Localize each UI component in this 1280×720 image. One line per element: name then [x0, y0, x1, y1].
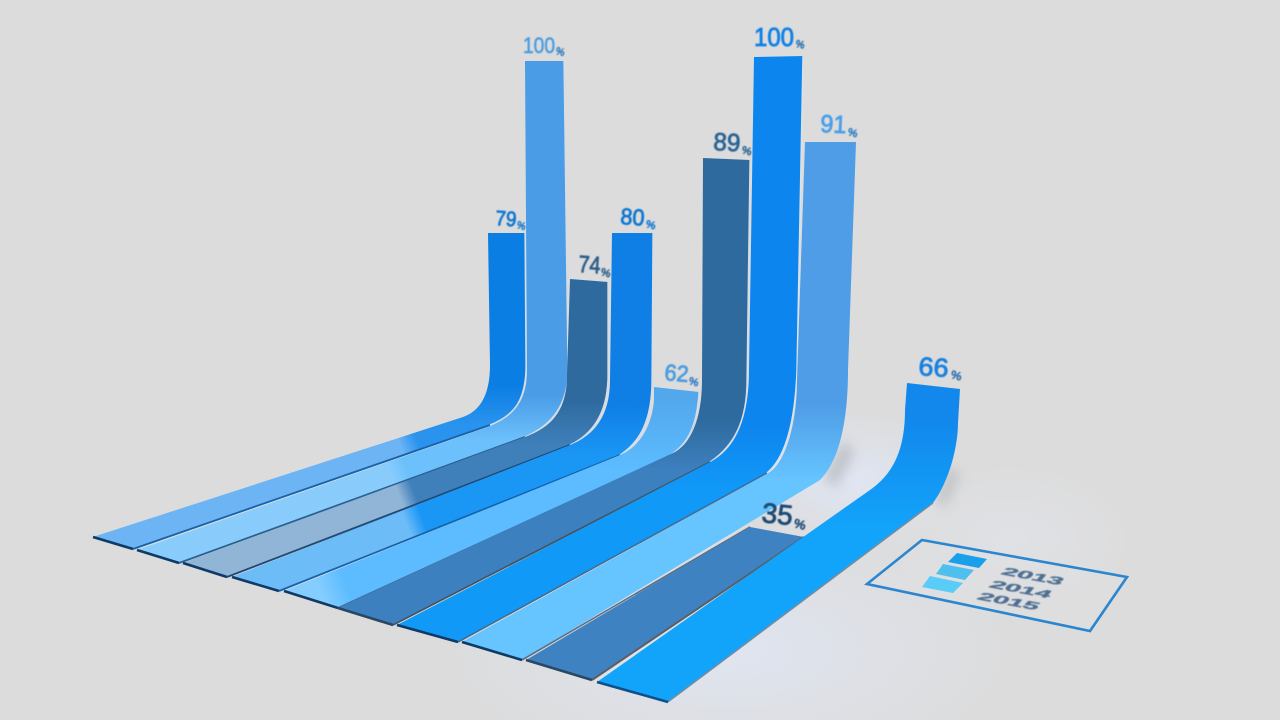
legend swatch: 2014	[936, 564, 974, 580]
label: 80%: 80	[620, 203, 645, 231]
legend frame	[867, 540, 1127, 631]
ribbon: 80%	[232, 233, 653, 591]
label: 62%: %	[687, 375, 700, 390]
legend labels	[974, 565, 1068, 613]
label: 62%: 62	[664, 359, 690, 387]
label: 66%	[918, 351, 964, 384]
label: 89%: 89	[713, 128, 741, 157]
legend labels: 2013	[998, 565, 1068, 588]
ribbon: 74%	[183, 279, 608, 577]
label: 62%	[664, 359, 700, 390]
label: 80%: %	[644, 218, 657, 233]
label: 89%	[713, 128, 753, 159]
label: 100% front: 100	[754, 22, 794, 52]
ribbon: 62%	[284, 387, 699, 608]
ribbon: 66%	[597, 383, 960, 702]
legend labels: 2015	[974, 590, 1044, 613]
label: 35%: %	[792, 515, 808, 533]
label: 66%: %	[949, 367, 964, 384]
label: 91%: %	[846, 126, 859, 141]
label: 91%: 91	[820, 110, 847, 139]
label: 35%: 35	[760, 497, 794, 531]
label: 79%: 79	[495, 207, 517, 231]
legend swatch: 2015	[922, 576, 963, 593]
legend swatch: 2013	[948, 553, 987, 568]
ribbon: 35%	[526, 527, 804, 680]
ribbon: 100% back	[137, 61, 568, 563]
label: 79%: %	[515, 219, 527, 233]
ribbon: 89%	[338, 158, 750, 625]
legend labels: 2014	[986, 578, 1056, 601]
label: 74%: %	[599, 266, 612, 281]
label: 74%: 74	[578, 251, 601, 280]
label: 100% back: 100	[523, 33, 555, 58]
label: 100% front: %	[794, 38, 806, 52]
label: 66%: 66	[918, 351, 950, 383]
label: 80%	[620, 203, 657, 233]
ribbon: 79%	[93, 233, 526, 549]
value labels	[495, 22, 964, 533]
label: 89%: %	[740, 144, 753, 159]
label: 100% back: %	[554, 45, 566, 59]
ribbon: 100% front	[397, 56, 803, 642]
ribbon: 91%	[462, 142, 856, 660]
label: 35%	[760, 497, 808, 533]
legend	[867, 540, 1127, 631]
